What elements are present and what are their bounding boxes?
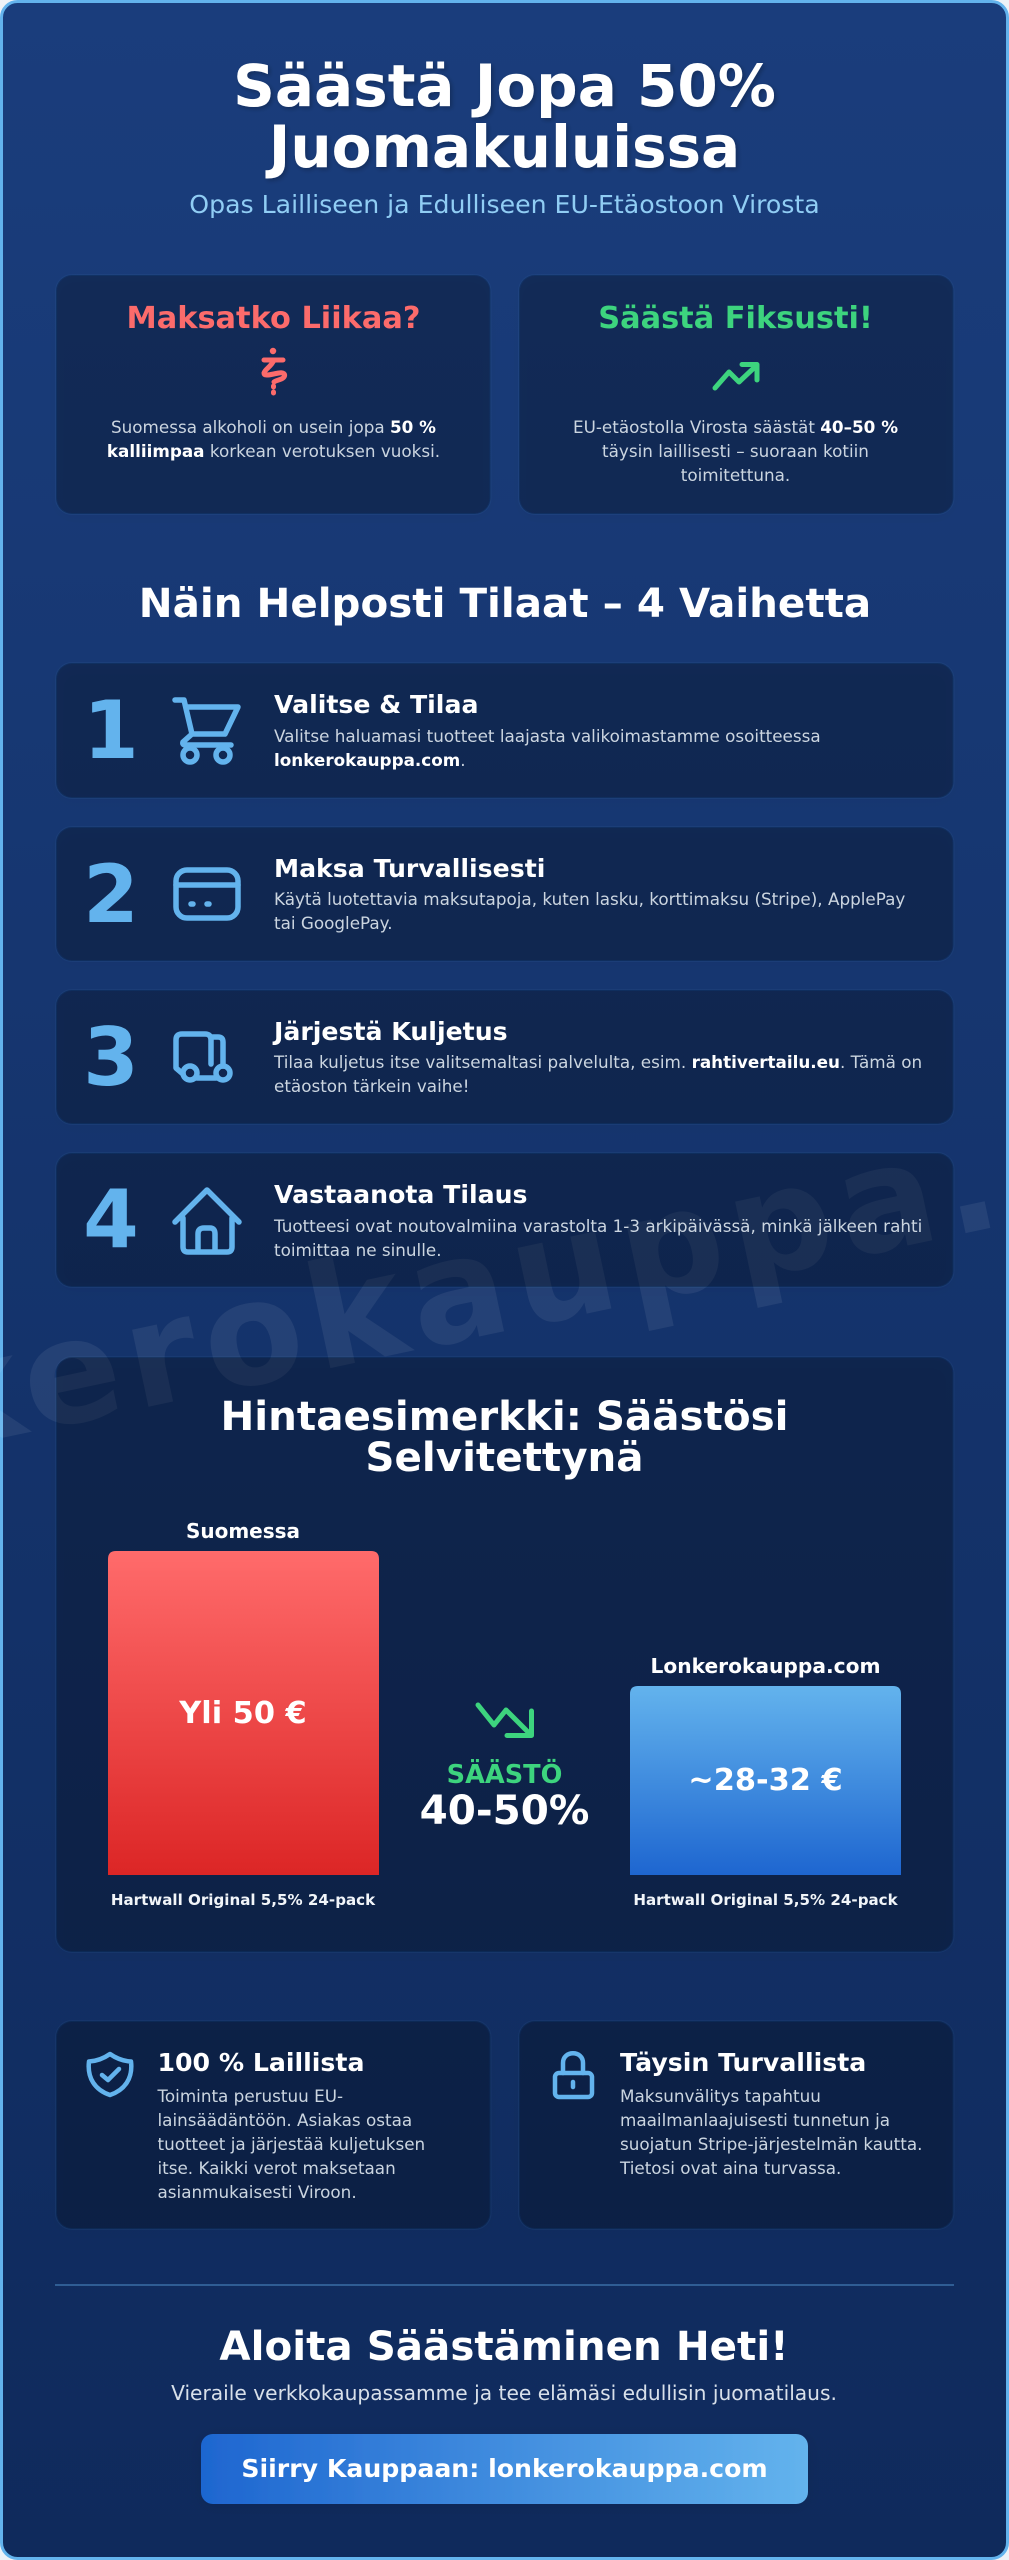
bar: Lonkerokauppa: Lonkerokauppa.com [650, 1654, 880, 1678]
number 4: 4 [83, 1173, 139, 1266]
text: overpaying: Suomessa alkoholi on usein jopa 50 % [111, 417, 436, 437]
CTA button [201, 2434, 808, 2504]
heading: save smart: Säästä Fiksusti! [598, 301, 873, 336]
savings callout: SÄÄSTÖ [447, 1759, 562, 1790]
bar: Lonkerokauppa [630, 1654, 901, 1909]
bar: Finland [108, 1519, 379, 1909]
savings callout: 40-50% [420, 1786, 589, 1834]
icon: truck [176, 1034, 230, 1080]
legal text: itse. Kaikki verot maksetaan [158, 2158, 396, 2178]
step 3 text [272, 1017, 922, 1096]
step 1 text [274, 690, 821, 770]
panel: legal [56, 2021, 490, 2229]
legal text: tuotteet ja järjestää kuljetuksen [158, 2134, 425, 2154]
title: Säästä Jopa 50% [233, 52, 776, 120]
subtitle: Opas Lailliseen ja Edulliseen EU-Etäostoon Virosta [189, 190, 820, 219]
legal text: Toiminta perustuu EU- [156, 2086, 343, 2106]
price heading: Selvitettynä [365, 1433, 644, 1481]
security text: Täysin Turvallista [620, 2048, 866, 2077]
call to action [171, 2322, 837, 2504]
header [189, 52, 820, 219]
bar: Finland: Suomessa [186, 1519, 300, 1543]
step 2 text: Käytä luotettavia maksutapoja, kuten lasku, korttimaksu (Stripe), ApplePay [274, 889, 905, 909]
bar: Lonkerokauppa: Hartwall Original 5,5% 24-pack [633, 1891, 899, 1909]
icon: trending up arrow [715, 364, 757, 388]
step 4 text: Tuotteesi ovat noutovalmiina varastolta 1-3 arkipäivässä, minkä jälkeen rahti [273, 1216, 922, 1236]
text: save smart: EU-etäostolla Virosta säästät 40–50 % [573, 417, 898, 437]
step 4 text: toimittaa ne sinulle. [274, 1240, 442, 1260]
panel: price example [56, 1357, 954, 1952]
number 1: 1 [83, 684, 139, 777]
text: overpaying: kalliimpaa korkean verotuksen vuoksi. [107, 441, 440, 461]
number 2: 2 [83, 848, 139, 941]
CTA heading: Aloita Säästäminen Heti! [219, 2322, 789, 2370]
step 1 text: Valitse & Tilaa [274, 690, 478, 719]
step 4 text: Vastaanota Tilaus [274, 1180, 528, 1209]
security text: Tietosi ovat aina turvassa. [619, 2158, 841, 2178]
step 3 text: Järjestä Kuljetus [272, 1017, 508, 1046]
legal text [156, 2048, 425, 2202]
bar: Lonkerokauppa: ~28-32 € [688, 1763, 843, 1798]
step 2 text [274, 854, 905, 933]
price heading: Hintaesimerkki: Säästösi [220, 1392, 789, 1440]
icon: credit card [176, 870, 238, 918]
icon: red squiggle [264, 348, 285, 397]
CTA button: Siirry Kauppaan: lonkerokauppa.com [241, 2454, 768, 2483]
icon: house [175, 1190, 239, 1252]
step 2 text: tai GooglePay. [274, 913, 393, 933]
security text: suojatun Stripe-järjestelmän kautta. [620, 2134, 922, 2154]
panel: overpaying [56, 275, 490, 514]
text: save smart: toimitettuna. [681, 465, 790, 485]
section heading: steps: Näin Helposti Tilaat – 4 Vaihetta [139, 579, 871, 627]
legal text: asianmukaisesti Viroon. [158, 2182, 357, 2202]
step 2 text: Maksa Turvallisesti [274, 854, 545, 883]
step 2 [56, 827, 954, 961]
icon: trending down arrow [478, 1705, 532, 1736]
heading: overpaying: Maksatko Liikaa? [126, 301, 420, 336]
step 3 [56, 990, 954, 1124]
step 3 text: Tilaa kuljetus itse valitsemaltasi palvelulta, esim. rahtivertailu.eu. Tämä on [274, 1052, 922, 1072]
bar: Finland: Hartwall Original 5,5% 24-pack [111, 1891, 376, 1909]
legal text: lainsäädäntöön. Asiakas ostaa [158, 2110, 412, 2130]
CTA text: Vieraile verkkokaupassamme ja tee elämäsi edullisin juomatilaus. [171, 2381, 837, 2405]
legal text: 100 % Laillista [158, 2048, 364, 2077]
panel: save smart [519, 275, 954, 514]
icon: shopping cart [175, 700, 238, 762]
savings callout [420, 1705, 589, 1834]
security text: maailmanlaajuisesti tunnetun ja [620, 2110, 890, 2130]
icon: shield check [89, 2054, 131, 2095]
step 3 text: etäoston tärkein vaihe! [274, 1076, 469, 1096]
step 1 text: Valitse haluamasi tuotteet laajasta valikoimastamme osoitteessa [274, 726, 821, 746]
step 4 [56, 1153, 954, 1287]
panel: security [519, 2021, 954, 2229]
text: save smart: täysin laillisesti – suoraan kotiin [602, 441, 869, 461]
bar: Finland: Yli 50 € [178, 1696, 307, 1731]
step 4 text [273, 1180, 922, 1260]
number 3: 3 [83, 1011, 139, 1104]
title: Juomakuluissa [265, 113, 740, 181]
step 1 text: lonkerokauppa.com. [274, 750, 466, 770]
security text: Maksunvälitys tapahtuu [620, 2086, 821, 2106]
icon: padlock [555, 2053, 592, 2097]
step 1 [56, 663, 954, 798]
security text [619, 2048, 922, 2178]
